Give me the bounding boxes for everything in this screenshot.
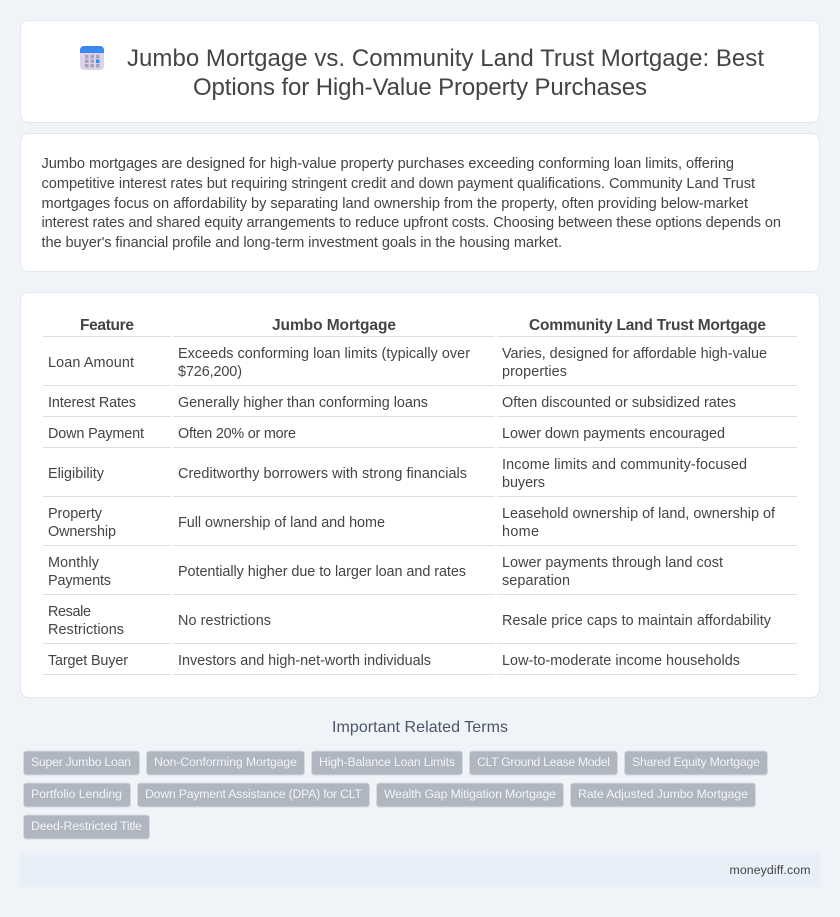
title	[127, 45, 764, 101]
row: Eligibility: Income limits and community-focused	[502, 457, 747, 473]
row: Property Ownership: Ownership	[48, 524, 116, 540]
table header row: Feature	[80, 317, 134, 334]
row: Target Buyer: Investors and high-net-worth individuals	[178, 653, 431, 669]
tag: CLT Ground Lease Model: CLT Ground Lease Model	[477, 755, 610, 769]
row: Monthly Payments: Lower payments through land cost	[502, 555, 723, 571]
tag: CLT Ground Lease Model	[470, 751, 618, 775]
row: Resale Restrictions	[43, 604, 797, 644]
tag: Deed-Restricted Title	[24, 815, 150, 839]
tag: Shared Equity Mortgage	[624, 751, 768, 775]
row: Loan Amount: $726,200)	[178, 364, 242, 380]
row: Property Ownership: Property	[48, 506, 103, 522]
row: Loan Amount: Loan Amount	[48, 355, 134, 371]
row: Eligibility	[43, 457, 797, 497]
tag: Shared Equity Mortgage: Shared Equity Mortgage	[632, 755, 760, 769]
intro text: interest rates and shared equity arrangements to reduce upfront costs. Choosing between these options depends on	[42, 215, 781, 231]
row: Resale Restrictions: Resale	[48, 604, 91, 620]
row: Monthly Payments	[43, 555, 797, 595]
row: Loan Amount: properties	[502, 364, 567, 380]
row: Resale Restrictions: Resale price caps to maintain affordability	[502, 613, 772, 629]
related terms heading: Important Related Terms	[332, 719, 508, 736]
intro text	[42, 156, 781, 251]
row: Target Buyer	[43, 653, 797, 675]
row: Monthly Payments: Payments	[48, 573, 111, 589]
row: Resale Restrictions: No restrictions	[178, 613, 271, 629]
row: Eligibility: Creditworthy borrowers with strong financials	[178, 466, 467, 482]
row: Down Payment: Lower down payments encouraged	[502, 426, 725, 442]
row: Down Payment: Often 20% or more	[178, 426, 296, 442]
tag: Down Payment Assistance (DPA) for CLT	[138, 783, 370, 807]
tag: Non-Conforming Mortgage: Non-Conforming Mortgage	[154, 755, 297, 769]
row: Eligibility: Eligibility	[48, 466, 105, 482]
tag: High-Balance Loan Limits: High-Balance Loan Limits	[319, 755, 455, 769]
tag: Portfolio Lending	[24, 783, 130, 807]
row: Monthly Payments: Monthly	[48, 555, 100, 571]
tag: Portfolio Lending: Portfolio Lending	[31, 787, 122, 801]
tag: Rate Adjusted Jumbo Mortgage: Rate Adjusted Jumbo Mortgage	[578, 787, 748, 801]
table header row: Community Land Trust Mortgage	[529, 317, 766, 334]
tag: Rate Adjusted Jumbo Mortgage	[570, 783, 756, 807]
row: Loan Amount: Varies, designed for affordable high-value	[502, 346, 767, 362]
row: Down Payment: Down Payment	[48, 426, 144, 442]
tag: Wealth Gap Mitigation Mortgage	[376, 783, 564, 807]
row: Target Buyer: Target Buyer	[48, 653, 128, 669]
table header row	[43, 317, 797, 337]
icon: calendar	[80, 46, 104, 70]
tag: Super Jumbo Loan	[24, 751, 140, 775]
row: Property Ownership: home	[502, 524, 539, 540]
row: Interest Rates: Often discounted or subsidized rates	[502, 395, 736, 411]
footer bar	[20, 853, 820, 887]
intro text: the buyer's financial profile and long-term investment goals in the housing market.	[42, 235, 562, 251]
tag: Deed-Restricted Title: Deed-Restricted Title	[31, 819, 142, 833]
row: Down Payment	[43, 426, 797, 448]
row: Target Buyer: Low-to-moderate income households	[502, 653, 740, 669]
row: Interest Rates	[43, 395, 797, 417]
intro text: Jumbo mortgages are designed for high-value property purchases exceeding conforming loan limits, offering	[42, 156, 734, 172]
row: Resale Restrictions: Restrictions	[48, 622, 124, 638]
tag: Non-Conforming Mortgage	[146, 751, 304, 775]
row: Interest Rates: Interest Rates	[48, 395, 136, 411]
row: Property Ownership: Full ownership of land and home	[178, 515, 385, 531]
intro text: mortgages focus on affordability by separating land ownership from the property, often providing below-market	[42, 196, 748, 212]
title: Jumbo Mortgage vs. Community Land Trust Mortgage: Best	[127, 45, 764, 72]
tag: High-Balance Loan Limits	[312, 751, 462, 775]
intro text: competitive interest rates but requiring stringent credit and down payment qualifications. Community Land Trust	[42, 176, 755, 192]
row: Property Ownership	[43, 506, 797, 546]
row: Interest Rates: Generally higher than conforming loans	[178, 395, 428, 411]
row: Loan Amount	[43, 346, 797, 386]
tag: Super Jumbo Loan: Super Jumbo Loan	[31, 755, 131, 769]
related terms tags	[24, 751, 768, 839]
panel: comparison table	[20, 292, 820, 698]
row: Loan Amount: Exceeds conforming loan limits (typically over	[178, 346, 470, 362]
panel: header	[20, 20, 820, 122]
tag: Down Payment Assistance (DPA) for CLT: Down Payment Assistance (DPA) for CLT	[145, 787, 362, 801]
row: Monthly Payments: separation	[502, 573, 570, 589]
row: Property Ownership: Leasehold ownership of land, ownership of	[502, 506, 776, 522]
panel: intro	[20, 134, 820, 272]
tag: Wealth Gap Mitigation Mortgage: Wealth Gap Mitigation Mortgage	[384, 787, 556, 801]
footer source: moneydiff.com	[730, 863, 810, 877]
table header row: Jumbo Mortgage	[272, 317, 396, 334]
title: Options for High-Value Property Purchases	[193, 74, 647, 101]
row: Eligibility: buyers	[502, 475, 545, 491]
row: Monthly Payments: Potentially higher due to larger loan and rates	[178, 564, 466, 580]
